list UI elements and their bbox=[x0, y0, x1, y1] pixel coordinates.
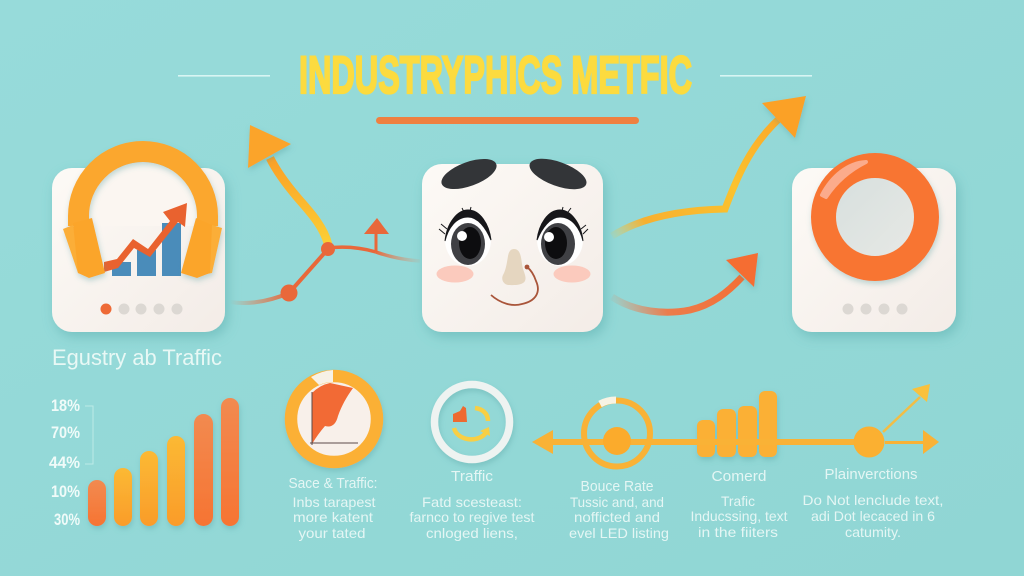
icon: blue bars bbox=[112, 223, 181, 276]
arrow: small orange bbox=[364, 218, 389, 252]
eyebrows bbox=[438, 152, 590, 196]
branching connector bbox=[230, 125, 420, 303]
axis labels: 44% bbox=[49, 453, 80, 472]
caption: traffic: Egustry ab Traffic bbox=[52, 345, 222, 370]
bar chart bbox=[49, 396, 239, 529]
text: traffic: Traffic bbox=[451, 468, 494, 485]
text: plainverctions: catumity. bbox=[845, 524, 901, 540]
eye: left bbox=[439, 207, 491, 266]
text: comerd: in the fiiters bbox=[698, 524, 778, 540]
text: bounce rate bbox=[569, 478, 669, 541]
axis labels bbox=[49, 396, 93, 529]
text: bounce rate: nofficted and bbox=[574, 509, 660, 525]
icon: orange ring bbox=[822, 162, 926, 268]
axis labels: 10% bbox=[51, 482, 80, 501]
marker: dot with arrow bbox=[854, 384, 930, 458]
text: sales and traffic: your tated bbox=[298, 525, 366, 541]
icon: area chart dial bbox=[291, 370, 377, 462]
marker: ring bbox=[584, 400, 650, 466]
text: plainverctions: adi Dot lecaced in 6 bbox=[811, 508, 935, 524]
pagination dots bbox=[100, 304, 182, 314]
text: comerd: Trafic bbox=[721, 493, 755, 509]
panel: headphones card bbox=[52, 152, 225, 332]
title: INDUSTRYPHICS METFIC bbox=[299, 46, 692, 105]
text: sales and traffic: Inbs tarapest bbox=[292, 494, 376, 510]
text: plainverctions bbox=[802, 466, 944, 540]
axis labels: 70% bbox=[51, 423, 80, 442]
nose bbox=[502, 249, 526, 285]
axis labels: 18% bbox=[51, 396, 80, 415]
pagination dots bbox=[842, 304, 908, 314]
text: bounce rate: evel LED listing bbox=[569, 525, 669, 541]
text: comerd: Comerd bbox=[712, 468, 766, 485]
panel: face card bbox=[422, 152, 603, 332]
axis labels: 30% bbox=[54, 510, 80, 529]
text: bounce rate: Tussic and, and bbox=[570, 494, 664, 510]
timeline axis bbox=[532, 430, 939, 454]
icon: white ring cycle bbox=[434, 384, 510, 460]
panel: ring card bbox=[792, 162, 956, 332]
text: comerd: Inducssing, text bbox=[690, 508, 788, 524]
text: comerd bbox=[690, 468, 788, 540]
cheeks bbox=[436, 266, 590, 282]
text: sales and traffic: more katent bbox=[293, 509, 373, 525]
arrow: yellow curve upward bbox=[248, 125, 328, 244]
text: sales and traffic bbox=[288, 475, 378, 541]
text: sales and traffic: Sace & Traffic: bbox=[288, 475, 378, 492]
text: traffic: Fatd scesteast: bbox=[422, 494, 522, 510]
arrow: upper yellow bbox=[612, 96, 806, 236]
text: bounce rate: Bouce Rate bbox=[580, 478, 654, 495]
text: plainverctions: Do Not lenclude text, bbox=[802, 492, 944, 508]
icon: rising trend arrow bbox=[104, 203, 187, 272]
mouth bbox=[491, 265, 538, 305]
timeline bbox=[532, 384, 939, 466]
bars bbox=[88, 398, 239, 526]
arrow: lower orange bbox=[612, 253, 758, 312]
title bbox=[178, 46, 812, 124]
text: traffic: cnloged liens, bbox=[426, 525, 518, 541]
text: plainverctions: Plainverctions bbox=[824, 466, 918, 483]
timeline bars bbox=[697, 391, 777, 457]
icon: headphones bbox=[63, 152, 222, 278]
text: traffic: farnco to regive test bbox=[410, 509, 535, 525]
eye: right bbox=[537, 207, 588, 266]
text: traffic bbox=[410, 468, 535, 541]
